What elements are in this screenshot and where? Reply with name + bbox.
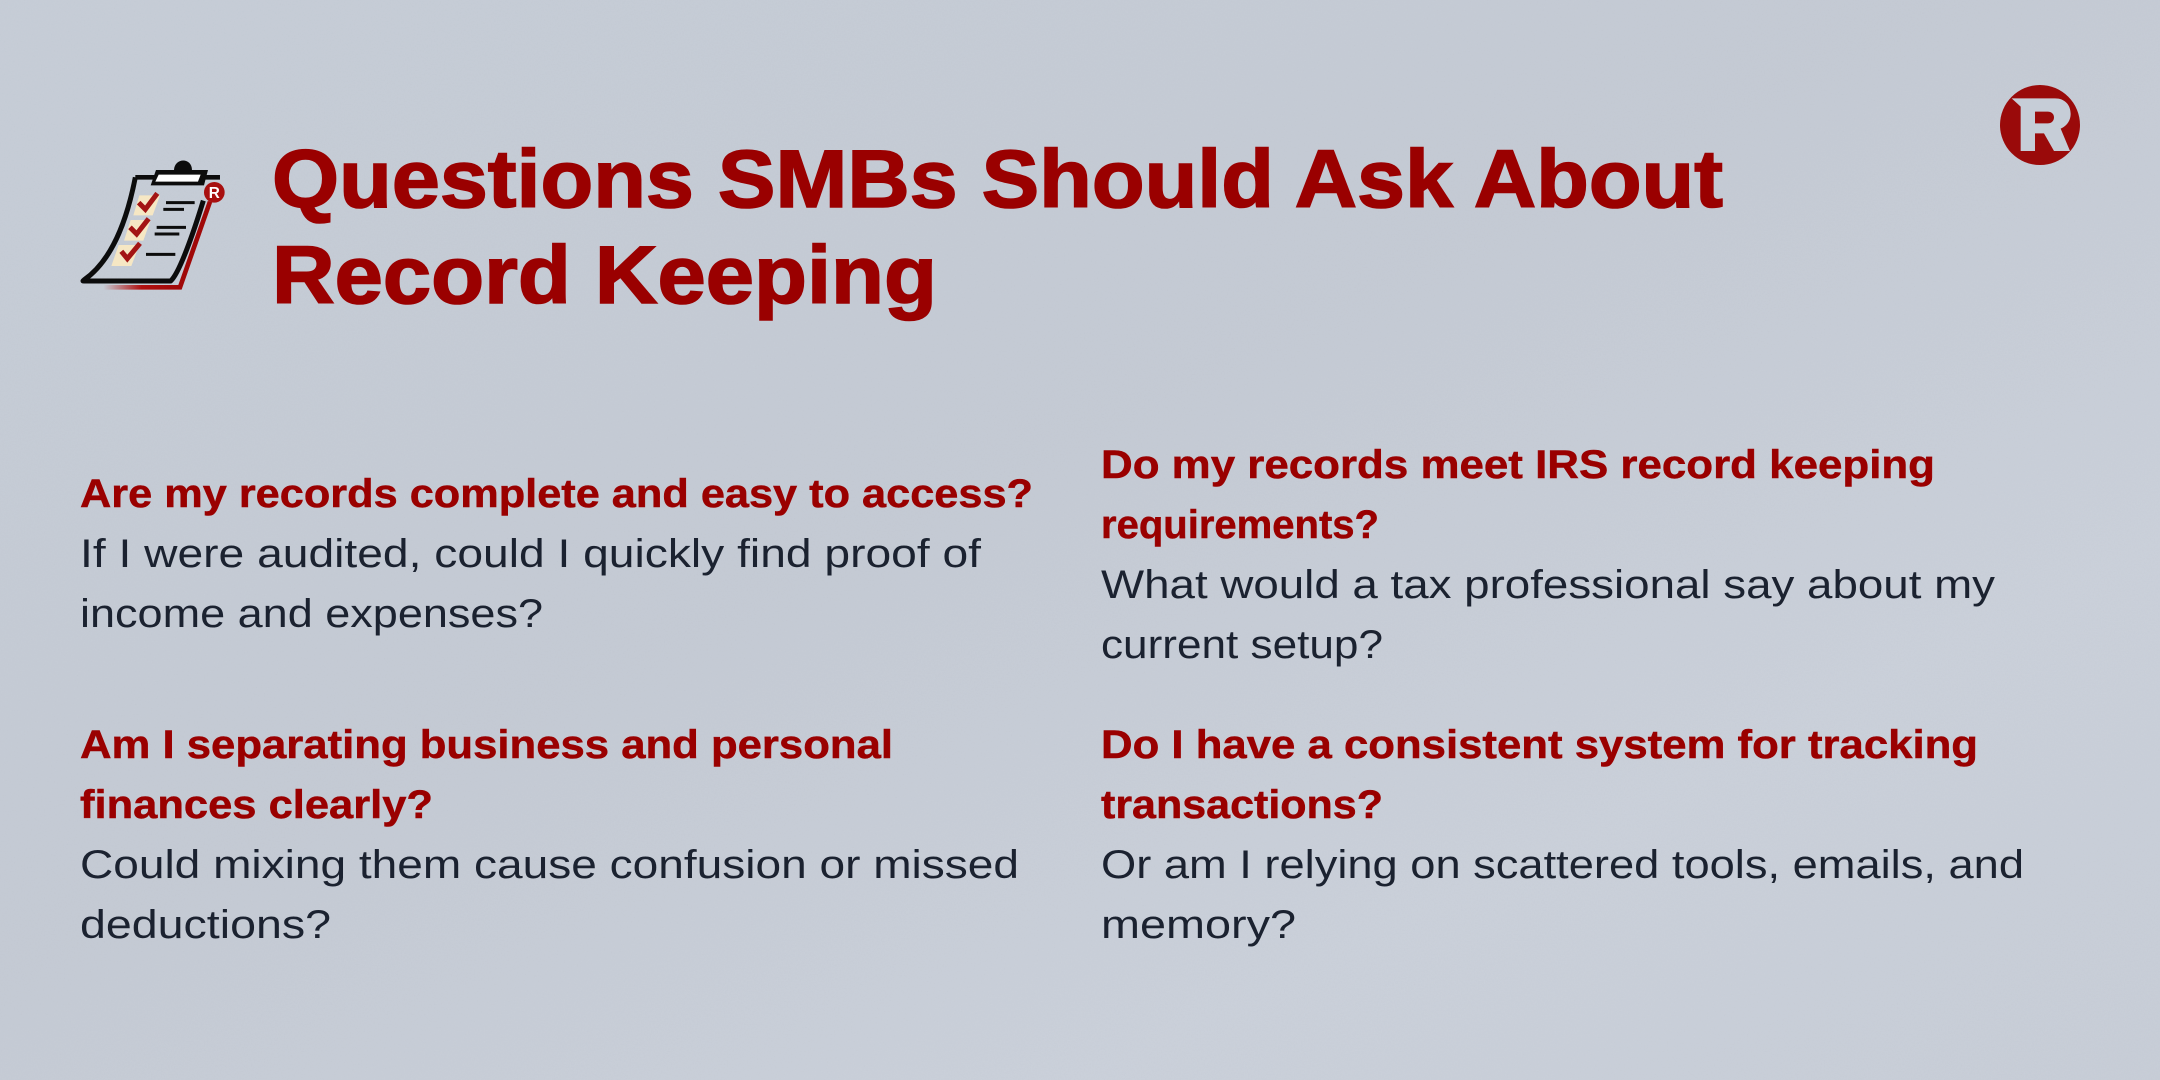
text block: complete and easy to access: income and expenses? <box>80 592 543 636</box>
text block: consistent tracking system: memory? <box>1101 903 1296 947</box>
text block: IRS requirements: requirements? <box>1101 503 1379 547</box>
text block: separating finances <box>80 723 1019 947</box>
text block: IRS requirements: current setup? <box>1101 623 1383 667</box>
text block: IRS requirements <box>1101 443 1995 667</box>
text block: separating finances: Am I separating business and personal <box>80 723 893 767</box>
text block: separating finances: Could mixing them cause confusion or missed <box>80 843 1019 887</box>
text block: consistent tracking system <box>1101 723 2024 947</box>
title: Questions SMBs Should Ask About <box>272 134 1723 225</box>
text block: complete and easy to access <box>80 472 1033 636</box>
text block: consistent tracking system: Do I have a consistent system for tracking <box>1101 723 1978 767</box>
text block: separating finances: deductions? <box>80 903 331 947</box>
text block: complete and easy to access: If I were audited, could I quickly find proof of <box>80 532 982 576</box>
text block: separating finances: finances clearly? <box>80 783 433 827</box>
text block: IRS requirements: Do my records meet IRS record keeping <box>1101 443 1935 487</box>
text block: complete and easy to access: Are my records complete and easy to access? <box>80 472 1033 516</box>
logo: R badge <box>2000 85 2080 165</box>
text block: consistent tracking system: transactions? <box>1101 783 1383 827</box>
text block: IRS requirements: What would a tax professional say about my <box>1101 563 1995 607</box>
title <box>272 134 1723 321</box>
title: Record Keeping <box>272 230 937 321</box>
text block: consistent tracking system: Or am I relying on scattered tools, emails, and <box>1101 843 2024 887</box>
icon: clipboard checklist <box>83 160 225 287</box>
icon: clipboard checklist: R <box>209 185 220 202</box>
